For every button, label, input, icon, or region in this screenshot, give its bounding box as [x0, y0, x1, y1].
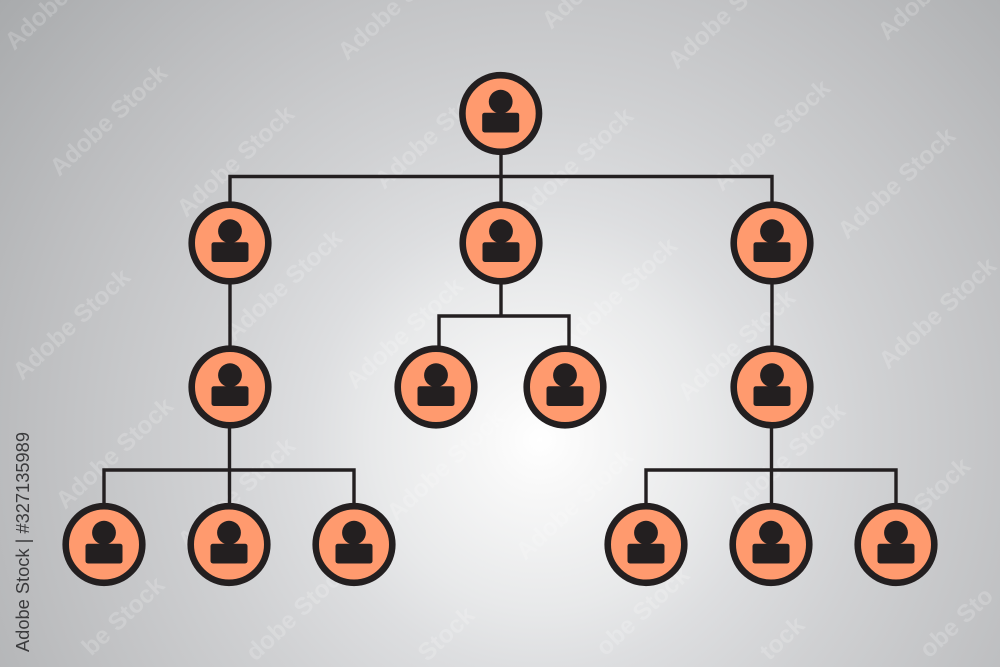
stock watermarks: Adobe Stock	[45, 59, 173, 181]
stock watermarks: obe Sto	[915, 582, 999, 663]
stock id side label: Adobe Stock | #327135989	[13, 432, 33, 652]
stock watermarks: Adobe Stock	[382, 404, 510, 526]
stock watermarks: be Stock	[77, 571, 170, 661]
node: level 3 centre left	[398, 349, 474, 425]
stock watermarks: Adobe Stock	[833, 122, 961, 244]
stock watermarks: Adobe Stock	[708, 74, 836, 196]
stock watermarks: Adobe Stock	[673, 284, 801, 406]
stock watermarks: Stock	[413, 601, 480, 667]
stock watermarks: Adobe Stock	[220, 224, 348, 346]
node: level 4 right group 2	[733, 506, 809, 583]
stock watermarks: Adobe Stock	[370, 72, 498, 194]
node: level 2 centre	[463, 205, 539, 281]
stock watermarks: Adobe Stock	[8, 263, 136, 385]
node: level 2 left	[192, 205, 268, 281]
node: level 4 right group 1	[608, 506, 684, 583]
node: level 3 centre right	[527, 349, 603, 425]
stock watermarks: Adobe Stock	[555, 232, 683, 354]
stock watermarks: Adobe Stock	[172, 100, 300, 222]
stock watermarks: Adobe Stock	[511, 443, 639, 565]
stock watermarks: Adobe Stock	[723, 397, 851, 519]
node: level 2 right	[734, 205, 810, 281]
stock watermarks: tock	[755, 611, 810, 666]
stock watermarks: Adobe Stock	[51, 392, 179, 514]
connector lines	[104, 150, 896, 508]
stock watermarks: Adobe Stock	[874, 252, 1000, 374]
node: level 4 left group 2	[191, 506, 267, 583]
stock watermarks: Adobe Stock	[341, 272, 469, 394]
node: level 3 right	[734, 349, 810, 425]
stock watermarks: obe Stock	[591, 561, 695, 661]
node: level 4 right group 3	[858, 506, 934, 583]
stock watermarks: dobe Stock	[241, 556, 356, 666]
stock watermarks: Adobe Stock	[848, 452, 976, 574]
stock watermarks: Adobe Stock	[511, 102, 639, 224]
node: top manager	[462, 75, 539, 152]
node: level 4 left group 1	[66, 506, 142, 583]
node: level 4 left group 3	[316, 506, 392, 583]
stock watermarks: Adobe Stock	[173, 432, 301, 554]
node: level 3 left	[192, 349, 268, 425]
